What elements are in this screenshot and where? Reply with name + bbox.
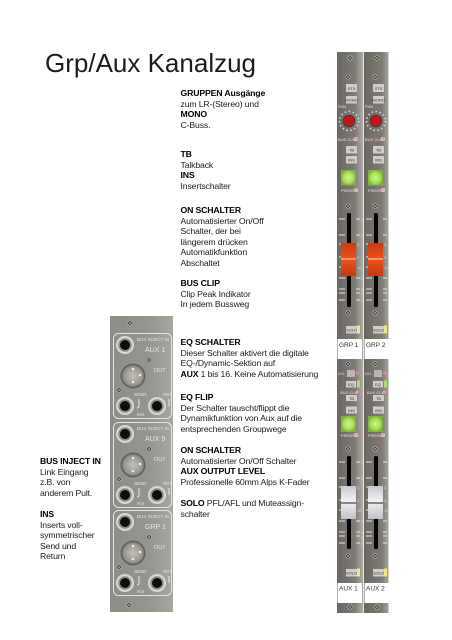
strip: GRP 2 / AUX 2: GRP 2: [366, 342, 386, 349]
strip: GRP 1 / AUX 1: INS: [348, 158, 355, 162]
text: INS: INS: [40, 509, 54, 519]
strip: GRP 1 / AUX 1: EQ: [348, 382, 354, 387]
rear panel illustration: OUT: [154, 457, 166, 463]
strip: GRP 1 / AUX 1: 5: [361, 233, 364, 238]
text: On Schalter and Aux Output Level: Automatisierter On/Off Schalter: [180, 456, 296, 466]
rear panel illustration: INS: [137, 501, 145, 506]
strip: GRP 2 / AUX 2: PAN: [365, 104, 373, 109]
strip: GRP 2 / AUX 2: MONO: [372, 98, 385, 102]
text: EQ Schalter: Dieser Schalter aktivert die digitale: [180, 348, 309, 358]
strip: GRP 1 / AUX 1: 30: [361, 287, 366, 292]
strip: GRP 2 / AUX 2: SOLO: [373, 570, 384, 576]
text: Bus Clip: BUS CLIP: [180, 278, 220, 288]
strip: GRP 2 / AUX 2: INS: [375, 408, 382, 413]
strip: GRP 1 / AUX 1: MONO: [345, 98, 358, 102]
strip: GRP 2 / AUX 2: TB: [376, 396, 381, 401]
text: Bus Clip: Clip Peak Indikator: [180, 288, 251, 298]
strip: GRP 1 / AUX 1: 0: [357, 242, 360, 247]
rear panel illustration: INS: [137, 412, 145, 417]
strip: GRP 2 / AUX 2: INS: [375, 158, 382, 162]
text: On Schalter and Aux Output Level: Professionelle 60mm Alps K-Fader: [180, 476, 309, 486]
text: On Schalter and Aux Output Level: AUX OUTPUT LEVEL: [180, 466, 265, 476]
rear panel illustration: SEND: [134, 481, 147, 486]
text: EQ Flip: Der Schalter tauscht/flippt die: [180, 402, 289, 412]
rear panel illustration: GRP 1: [145, 524, 166, 531]
text: Bus Inject In: z.B. von: [40, 477, 70, 487]
text: TB and INS: Insertschalter: [180, 180, 231, 190]
fader strips illustration: [337, 52, 389, 613]
text: On Schalter: Automatisierter On/Off: [180, 216, 263, 226]
text: EQ Flip: EQ FLIP: [180, 392, 213, 402]
text: Gruppen Ausgänge: C-Buss.: [180, 120, 210, 130]
text: Bus Inject In: anderem Pult.: [40, 488, 92, 498]
strip: GRP 2 / AUX 2: EQ: [375, 382, 381, 387]
strip: GRP 1 / AUX 1: TB: [349, 396, 354, 401]
text: Bus Inject In: BUS INJECT IN: [40, 456, 101, 466]
strip: GRP 1 / AUX 1: BUS CLIP: [338, 137, 357, 142]
rear panel illustration: INS: [137, 589, 145, 594]
strip: GRP 1 / AUX 1: SOLO: [346, 328, 357, 332]
strip: GRP 2 / AUX 2: TB: [376, 148, 381, 152]
rear panel illustration: RET: [163, 569, 172, 574]
strip: GRP 1 / AUX 1: TB: [349, 148, 354, 152]
text: TB and INS: INS: [180, 170, 195, 180]
text: Solo: SOLO PFL/AFL und Muteassign-: [180, 498, 304, 508]
strip: GRP 1 / AUX 1: 10: [357, 508, 362, 513]
text: Bus Inject In: [40, 456, 101, 498]
text: Bus Clip: In jedem Bussweg: [180, 299, 249, 309]
text: INS: symmetrischer: [40, 530, 95, 540]
text: On Schalter and Aux Output Level: [180, 445, 310, 486]
text: EQ Schalter: [180, 337, 318, 378]
text: INS: Return: [40, 551, 65, 561]
strip: GRP 2 / AUX 2: LVL: [365, 371, 373, 376]
text: EQ Schalter: EQ-/Dynamic-Sektion auf: [180, 358, 275, 368]
strip: GRP 2 / AUX 2: 5: [384, 255, 387, 260]
strip: GRP 1 / AUX 1: 20: [361, 519, 366, 524]
strip: GRP 1 / AUX 1: INS: [348, 408, 355, 413]
strip: GRP 2 / AUX 2: AUX 2: [366, 586, 385, 592]
strip: GRP 2 / AUX 2: PRE/EFK: [368, 188, 385, 193]
strip: GRP 2 / AUX 2: 10: [384, 265, 389, 270]
text: Solo: schalter: [180, 508, 210, 518]
strip: GRP 1 / AUX 1: 30: [361, 530, 366, 535]
strip: GRP 1 / AUX 1: 10: [357, 265, 362, 270]
strip: GRP 1 / AUX 1: STS: [348, 86, 356, 91]
text: On Schalter: [180, 205, 264, 268]
text: Bus Inject In: Link Eingang: [40, 466, 88, 476]
rear panel illustration: RET: [163, 392, 172, 397]
text: TB and INS: Talkback: [180, 160, 213, 170]
strip: GRP 2 / AUX 2: [364, 52, 389, 613]
text: On Schalter: längerem drücken: [180, 236, 248, 246]
text: TB and INS: [180, 149, 231, 190]
strip: GRP 2 / AUX 2: BUS CLIP: [365, 137, 384, 142]
text: INS: [40, 509, 95, 561]
strip: GRP 1 / AUX 1: 20: [361, 276, 366, 281]
text: EQ Flip: [180, 392, 302, 434]
rear panel illustration: SEND: [134, 569, 147, 574]
strip: GRP 2 / AUX 2: SOLO: [373, 328, 384, 332]
strip: GRP 2 / AUX 2: 10: [384, 508, 389, 513]
text: Gruppen Ausgänge: GRUPPEN Ausgänge: [180, 88, 265, 98]
rear panel illustration: BUS INJECT IN: [137, 337, 169, 342]
title: Grp/Aux Kanalzug: [45, 48, 256, 78]
strip: GRP 1 / AUX 1: SOLO: [346, 570, 357, 576]
strip: GRP 1 / AUX 1: 0: [361, 298, 364, 303]
strip: GRP 1 / AUX 1: GRP 1: [339, 342, 359, 349]
rear panel illustration: BUS INJECT IN: [137, 514, 169, 519]
text: Bus Clip: [180, 278, 251, 309]
text: Gruppen Ausgänge: zum LR-(Stereo) und: [180, 98, 259, 108]
text: On Schalter and Aux Output Level: ON SCHALTER: [180, 445, 241, 455]
text: INS: Send und: [40, 540, 76, 550]
strip: GRP 1 / AUX 1: 40: [361, 535, 366, 540]
strip: GRP 2 / AUX 2: 0: [384, 485, 387, 490]
text: Gruppen Ausgänge: MONO: [180, 109, 207, 119]
strip: GRP 1 / AUX 1: 0: [357, 485, 360, 490]
strip: GRP 2 / AUX 2: BUS CLIP: [367, 390, 386, 395]
text: On Schalter: Automatikfunktion: [180, 247, 247, 257]
text: Solo: [180, 498, 304, 518]
text: EQ Flip: entsprechenden Groupwege: [180, 424, 287, 434]
strip: GRP 1 / AUX 1: AUX 1: [339, 586, 358, 592]
rear panel illustration: [110, 316, 173, 612]
strip: GRP 1 / AUX 1: 60: [361, 541, 366, 546]
strip: GRP 1 / AUX 1: LVL: [338, 371, 346, 376]
strip: GRP 1 / AUX 1: 5: [361, 476, 364, 481]
rear panel illustration: AUX 9: [145, 436, 165, 443]
text: EQ Schalter: AUX 1 bis 16. Keine Automatisierung: [180, 368, 318, 378]
text: EQ Schalter: EQ SCHALTER: [180, 337, 240, 347]
strip: GRP 1 / AUX 1: 5: [357, 255, 360, 260]
strip: GRP 2 / AUX 2: STS: [375, 86, 383, 91]
strip: GRP 1 / AUX 1: 40: [361, 291, 366, 296]
text: On Schalter: Abschaltet: [180, 258, 220, 268]
rear panel illustration: OUT: [154, 368, 166, 374]
rear panel illustration: OUT: [154, 545, 166, 551]
strip: GRP 1 / AUX 1: PRE/EFK: [341, 188, 358, 193]
text: On Schalter: Schalter, der bei: [180, 226, 241, 236]
rear panel illustration: RET: [163, 481, 172, 486]
rear panel illustration: AUX 1: [145, 347, 165, 354]
text: Gruppen Ausgänge: [180, 88, 265, 130]
strip: GRP 1 / AUX 1: [337, 52, 366, 613]
strip: GRP 1 / AUX 1: 5: [357, 498, 360, 503]
strip: GRP 1 / AUX 1: PRE/EFK: [341, 433, 358, 438]
text: On Schalter: ON SCHALTER: [180, 205, 241, 215]
strip: GRP 2 / AUX 2: 0: [384, 242, 387, 247]
strip: GRP 1 / AUX 1: PAN: [338, 104, 346, 109]
strip: GRP 2 / AUX 2: 5: [384, 498, 387, 503]
strip: GRP 1 / AUX 1: 10: [361, 217, 366, 222]
strip: GRP 2 / AUX 2: PRE/EFK: [368, 433, 385, 438]
rear panel illustration: SEND: [134, 392, 147, 397]
strip: GRP 1 / AUX 1: BUS CLIP: [340, 390, 359, 395]
rear panel illustration: BUS INJECT IN: [137, 426, 169, 431]
text: EQ Flip: Dynamikfunktion von Aux auf die: [180, 413, 302, 423]
text: TB and INS: TB: [180, 149, 192, 159]
strip: GRP 1 / AUX 1: 10: [361, 460, 366, 465]
text: INS: Inserts voll-: [40, 520, 82, 530]
